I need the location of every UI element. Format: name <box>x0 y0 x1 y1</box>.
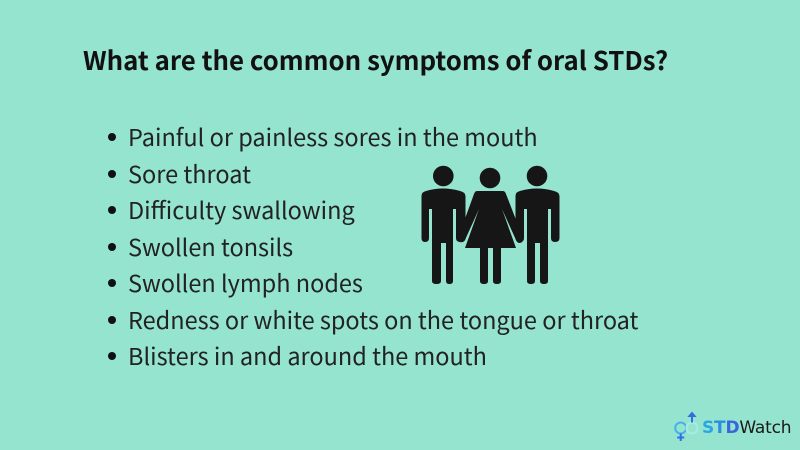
symptom list: Blisters in and around the mouth <box>128 338 487 372</box>
symptom list: Redness or white spots on the tongue or throat <box>128 302 638 336</box>
logo: STDWatch <box>674 412 791 441</box>
symptom list: Difficulty swallowing <box>128 192 355 226</box>
symptom list: Painful or painless sores in the mouth <box>128 119 538 153</box>
logo wordmark: STDWatch <box>702 418 791 438</box>
title: What are the common symptoms of oral STDs? <box>83 41 668 78</box>
symptom list: Swollen tonsils <box>128 229 293 263</box>
symptom list: Sore throat <box>128 156 251 190</box>
icon: gender symbols <box>674 412 698 441</box>
symptom list: Swollen lymph nodes <box>128 265 363 299</box>
symptom list <box>108 119 638 372</box>
